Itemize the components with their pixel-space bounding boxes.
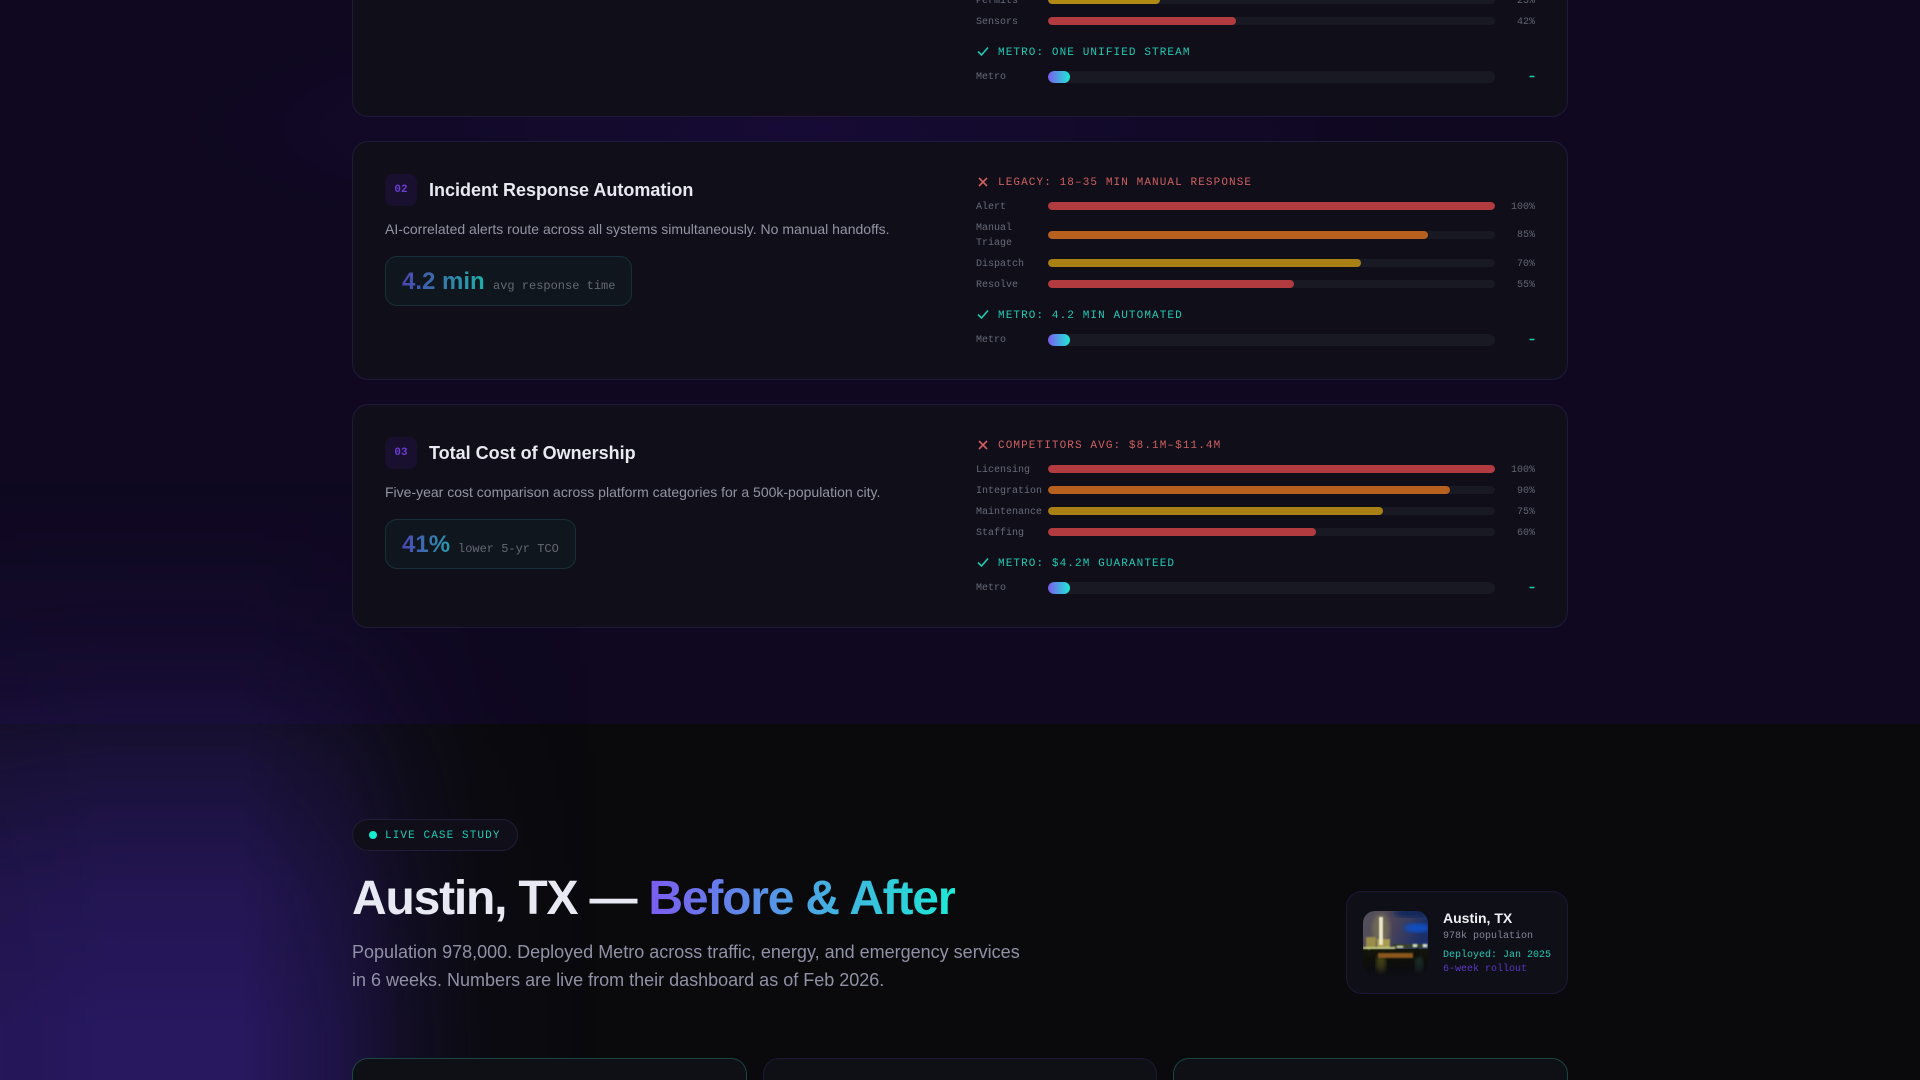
bar: Dispatch [976, 258, 1535, 270]
bar: Metro: – [1529, 72, 1535, 83]
panel: city info card [1346, 891, 1568, 994]
background: top section [0, 0, 1920, 724]
bar: Dispatch: 70% [1517, 259, 1535, 270]
bar: Manual Triage: 85% [1517, 230, 1535, 241]
bar: Metro: – [1529, 583, 1535, 594]
label: LIVE CASE STUDY [385, 830, 501, 842]
metric: 41% [385, 519, 576, 569]
panel: result card left [352, 1058, 747, 1080]
icon: live dot [369, 831, 377, 839]
bar: Alert: Alert [976, 202, 1006, 213]
badge: 02: 02 [394, 184, 408, 196]
panel: result card middle [763, 1058, 1157, 1080]
bar: Maintenance: 75% [1517, 507, 1535, 518]
badge: 03: 03 [394, 447, 408, 459]
heading: competitors average: COMPETITORS AVG: $8.1M–$11.4M [998, 440, 1221, 452]
heading: metro automated: METRO: 4.2 MIN AUTOMATED [998, 310, 1183, 322]
bar: Resolve [976, 280, 1535, 291]
bar: Metro [976, 334, 1535, 346]
metric: 4.2 min [385, 256, 632, 306]
background: bottom section [0, 724, 1920, 1080]
badge: 02 [385, 174, 417, 206]
text: description: Five-year cost comparison across platform categories for a 500k-population city. [385, 484, 880, 500]
bar: Permits [976, 0, 1535, 7]
panel: result card right [1173, 1058, 1568, 1080]
text: city name: Austin, TX [1443, 910, 1512, 926]
bar: Staffing [976, 528, 1535, 539]
bar: Staffing: 60% [1517, 528, 1535, 539]
text: rollout: 6-week rollout [1443, 964, 1527, 975]
text: case study intro [352, 942, 1020, 990]
bar: Manual Triage: Triage [976, 238, 1012, 249]
bar: Alert: 100% [1511, 202, 1535, 213]
chart: competitors vs metro cost [976, 440, 1535, 594]
bar: Metro: Metro [976, 72, 1006, 83]
bar: Metro: Metro [976, 335, 1006, 346]
bar: Metro: – [1529, 335, 1535, 346]
image: Austin skyline at night [1363, 911, 1428, 973]
panel: card 02 incident response [352, 141, 1568, 380]
bar: Resolve: 55% [1517, 280, 1535, 291]
bar: Integration: 90% [1517, 486, 1535, 497]
heading: legacy response: LEGACY: 18–35 MIN MANUAL RESPONSE [998, 177, 1252, 189]
metric value: 4.2 min [402, 268, 485, 295]
panel: card 03 total cost of ownership [352, 404, 1568, 628]
heading: total cost: Total Cost of Ownership [429, 443, 636, 463]
bar: Metro [976, 71, 1535, 83]
badge: live case study [352, 819, 518, 851]
bar: Resolve: Resolve [976, 280, 1018, 291]
bar: Licensing: 100% [1511, 465, 1535, 476]
chart: data silo bars [976, 0, 1535, 83]
bar: Metro: Metro [976, 583, 1006, 594]
bar: Sensors [976, 17, 1535, 28]
bar: Metro [976, 582, 1535, 594]
metric label: avg response time [493, 279, 615, 293]
bar: Manual Triage [976, 222, 1535, 249]
bar: Manual Triage: Manual [976, 223, 1012, 234]
bar: Alert [976, 202, 1535, 213]
text: case study intro: in 6 weeks. Numbers are live from their dashboard as of Feb 2026. [352, 970, 884, 990]
chart: legacy vs metro response [976, 177, 1535, 346]
heading: Austin before and after: Austin, TX — Before & After [352, 872, 955, 925]
bar: Integration [976, 486, 1535, 497]
metric value: 41% [402, 531, 450, 558]
heading: incident response: Incident Response Automation [429, 180, 693, 200]
heading: metro guaranteed: METRO: $4.2M GUARANTEED [998, 558, 1175, 570]
text: deployed date: Deployed: Jan 2025 [1443, 950, 1551, 961]
text: population: 978k population [1443, 931, 1533, 942]
bar: Maintenance [976, 506, 1535, 518]
text: description: AI-correlated alerts route across all systems simultaneously. No manual handoffs. [385, 221, 890, 237]
bar: Dispatch: Dispatch [976, 259, 1024, 270]
bar: Staffing: Staffing [976, 528, 1024, 539]
background: purple glow [0, 598, 464, 1080]
heading: metro unified stream: METRO: ONE UNIFIED STREAM [998, 47, 1191, 59]
bar: Sensors: Sensors [976, 17, 1018, 28]
bar: Licensing [976, 464, 1535, 476]
bar: Licensing: Licensing [976, 465, 1030, 476]
panel: card 01 unified data (continues above the visible area) [352, 0, 1568, 117]
bar: Integration: Integration [976, 486, 1042, 497]
bar: Sensors: 42% [1517, 17, 1535, 28]
bar: Maintenance: Maintenance [976, 507, 1042, 518]
badge: 03 [385, 437, 417, 469]
metric label: lower 5-yr TCO [458, 542, 559, 556]
text: case study intro: Population 978,000. Deployed Metro across traffic, energy, and emergency services [352, 942, 1020, 962]
